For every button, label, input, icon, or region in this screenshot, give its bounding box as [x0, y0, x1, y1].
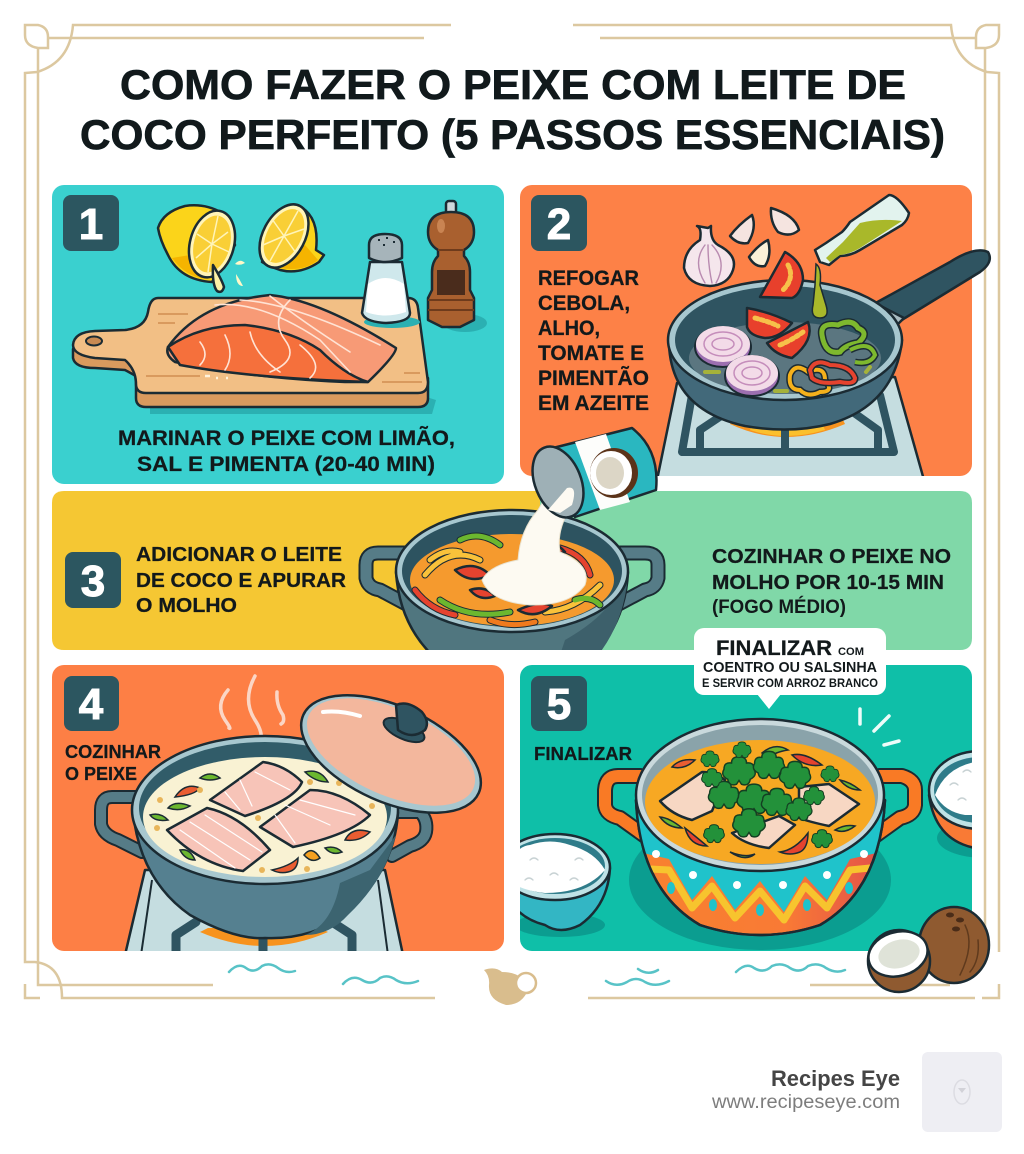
step 3 left text	[136, 543, 346, 617]
icon: salmon fillet	[167, 295, 396, 382]
panel: step 4 cook fish	[52, 665, 504, 955]
icon: onion slices	[695, 326, 779, 396]
step 2 text: PIMENTÃO	[538, 367, 649, 390]
title: COCO PERFEITO (5 PASSOS ESSENCIAIS)	[80, 111, 945, 158]
step 2 text	[538, 267, 649, 415]
callout: finalizar: COENTRO OU SALSINHA	[703, 659, 877, 676]
title	[80, 61, 945, 158]
vegetables	[150, 771, 370, 873]
step 2 text: CEBOLA,	[538, 292, 630, 315]
step 3 right text: COZINHAR O PEIXE NO	[712, 545, 951, 568]
step 2 text: ALHO,	[538, 317, 600, 340]
step 3 left text: ADICIONAR O LEITE	[136, 543, 342, 566]
title: COMO FAZER O PEIXE COM LEITE DE	[120, 61, 906, 108]
callout: finalizar: COM	[838, 646, 864, 658]
footer brand: www.recipeseye.com	[711, 1092, 900, 1113]
panel: step 3 coconut milk	[52, 491, 972, 650]
step 2 badge	[531, 195, 587, 251]
icon: coconut milk can	[523, 428, 656, 525]
step 4 badge: 4	[79, 680, 104, 729]
icon: colorful serving pot	[605, 719, 915, 950]
icon: pouring coconut milk	[482, 485, 586, 605]
icon: salt shaker	[362, 234, 420, 328]
icon: glass lid	[284, 671, 498, 837]
step 1 text: MARINAR O PEIXE COM LIMÃO,	[118, 427, 455, 450]
icon: sparkle lines	[860, 709, 899, 745]
step 1 badge: 1	[79, 200, 103, 249]
icon: gas stove	[657, 377, 924, 480]
step 4 text: O PEIXE	[65, 763, 137, 784]
cilantro	[701, 742, 839, 848]
step 5 text: FINALIZAR	[534, 743, 632, 764]
step 1 text: SAL E PIMENTA (20-40 MIN)	[137, 453, 435, 476]
callout: finalizar: FINALIZAR	[716, 637, 832, 660]
icon: coconuts	[863, 907, 989, 992]
fish pieces	[167, 762, 370, 871]
icon: olive oil bottle	[812, 195, 909, 318]
icon: pepper mill	[428, 201, 487, 332]
step 2 text: EM AZEITE	[538, 392, 649, 415]
icon: frying pan	[668, 250, 990, 430]
step 3 left text: DE COCO E APURAR	[136, 569, 346, 592]
step 2 text: TOMATE E	[538, 342, 644, 365]
step 3 badge: 3	[81, 557, 105, 606]
callout: finalizar	[694, 628, 886, 709]
step 3 right text	[712, 545, 951, 618]
vegetables	[660, 747, 860, 858]
icon: onion and garlic	[684, 208, 799, 286]
icon: cutting board	[73, 298, 436, 414]
footer brand: Recipes Eye	[771, 1066, 900, 1091]
icon: tomato slices	[747, 252, 810, 358]
footer brand	[711, 1066, 900, 1113]
step 5 badge	[531, 676, 587, 731]
logo box	[922, 1052, 1002, 1132]
icon: bell pepper rings	[790, 322, 875, 395]
step 1 text	[118, 427, 455, 476]
callout: finalizar: E SERVIR COM ARROZ BRANCO	[702, 678, 878, 690]
step 4 badge	[64, 676, 119, 731]
panel: step 1 marinate	[52, 185, 504, 484]
step 3 right text: MOLHO POR 10-15 MIN	[712, 571, 944, 594]
icon: pot with fish in coconut sauce	[101, 736, 426, 938]
step 4 text: COZINHAR	[65, 741, 161, 762]
icon: rice bowls	[520, 750, 972, 937]
icon: coconut ornament	[484, 968, 536, 1005]
panel: step 5 serve	[520, 665, 972, 951]
waves decoration	[229, 964, 845, 985]
icon: stove	[125, 870, 403, 955]
icon: pot with vegetables	[366, 510, 658, 670]
step 4 text	[65, 741, 161, 784]
step 3 right text: (FOGO MÉDIO)	[712, 595, 846, 618]
step 2 badge: 2	[547, 200, 571, 249]
step 5 badge: 5	[547, 680, 571, 729]
icon: lemons	[158, 196, 324, 292]
fish pieces	[660, 772, 859, 848]
step 3 badge	[65, 552, 121, 608]
icon: steam	[221, 676, 284, 748]
step 3 left text: O MOLHO	[136, 594, 237, 617]
panel: step 2 saute	[520, 185, 990, 480]
step 2 text: REFOGAR	[538, 267, 639, 290]
step 1 badge	[63, 195, 119, 251]
